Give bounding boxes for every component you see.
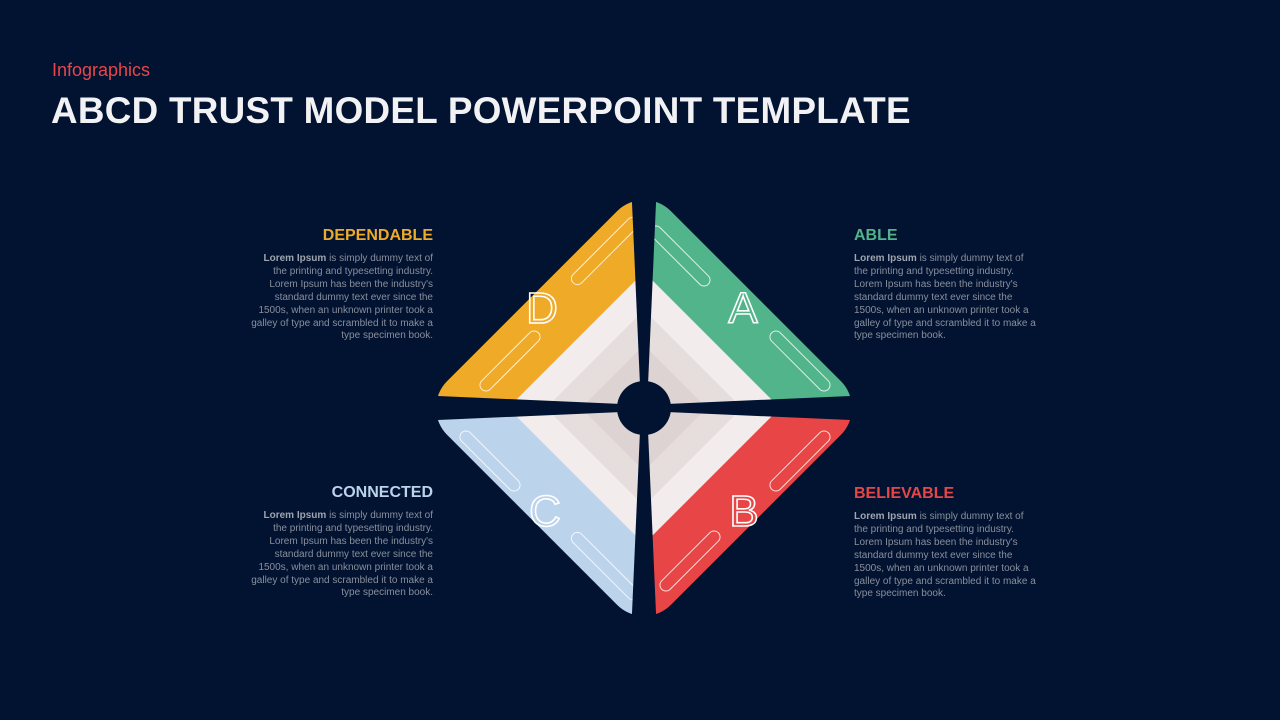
- decorative pills: [457, 215, 833, 602]
- text: believable: Lorem Ipsum is simply dummy text of the printing and typesetting industry. Lorem Ipsum has been the industry's standard dummy text ever since the 1500s, when an unknown printer took a galley of type and scrambled it to make a type specimen book.: [854, 511, 1036, 599]
- quadrant A: [652, 202, 850, 400]
- letters: [526, 284, 759, 536]
- text: dependable: Lorem Ipsum is simply dummy text of the printing and typesetting industry. Lorem Ipsum has been the industry's standard dummy text ever since the 1500s, when an unknown printer took a galley of type and scrambled it to make a type specimen book.: [251, 253, 433, 341]
- diagram: [438, 202, 850, 614]
- subtitle: Infographics: [52, 60, 150, 80]
- letters: D: [526, 284, 558, 333]
- gaps: [415, 180, 873, 636]
- letters: C: [529, 487, 561, 536]
- text: connected: CONNECTED: [332, 484, 433, 501]
- quadrant B: [652, 416, 850, 614]
- text: able: Lorem Ipsum is simply dummy text of the printing and typesetting industry. Lorem Ipsum has been the industry's standard dummy text ever since the 1500s, when an unknown printer took a galley of type and scrambled it to make a type specimen book.: [854, 253, 1036, 341]
- text: believable: BELIEVABLE: [854, 485, 954, 502]
- text: dependable: DEPENDABLE: [323, 227, 433, 244]
- letters: B: [729, 487, 759, 536]
- quadrant D: [438, 202, 636, 400]
- inner diamond: [508, 272, 780, 544]
- quadrant C: [438, 416, 636, 614]
- text: connected: Lorem Ipsum is simply dummy text of the printing and typesetting industry. Lorem Ipsum has been the industry's standard dummy text ever since the 1500s, when an unknown printer took a galley of type and scrambled it to make a type specimen book.: [251, 510, 433, 598]
- text: able: ABLE: [854, 227, 898, 244]
- title: ABCD TRUST MODEL POWERPOINT TEMPLATE: [51, 90, 911, 131]
- letters: A: [728, 284, 758, 333]
